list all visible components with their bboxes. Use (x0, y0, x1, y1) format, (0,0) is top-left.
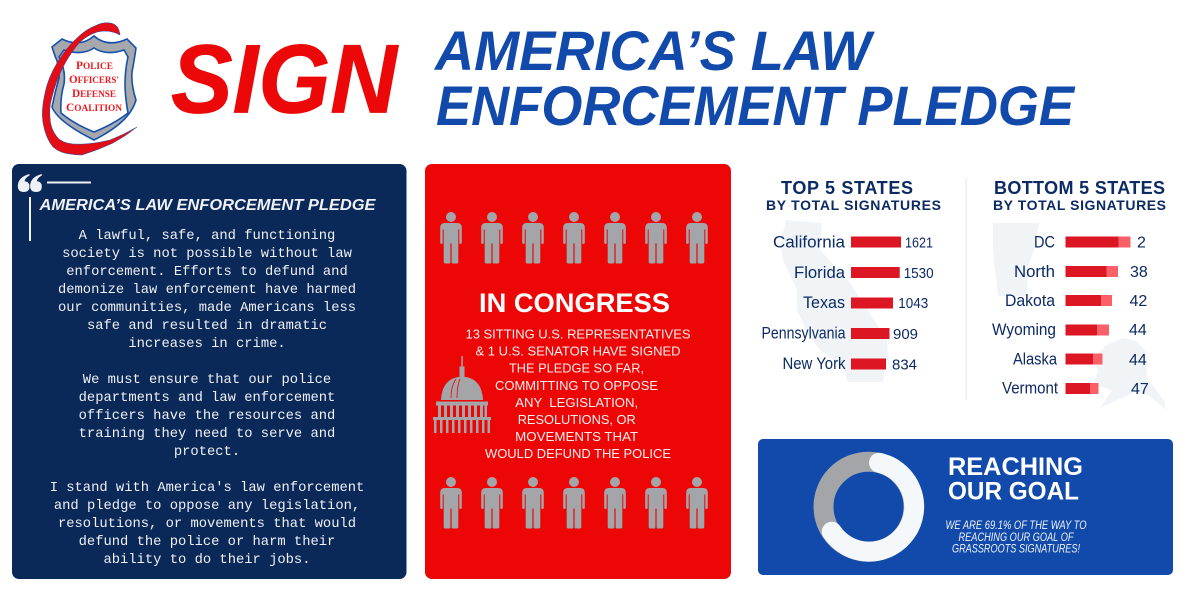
panel: reaching our goal (758, 439, 1173, 575)
pledge body text: and pledge to oppose any legislation, (54, 498, 360, 514)
values: 44 (1129, 322, 1147, 339)
pledge body text: protect. (174, 445, 240, 460)
bottom heading: BOTTOM 5 STATES (994, 178, 1165, 198)
congress body text: WOULD DEFUND THE POLICE (485, 446, 671, 461)
chart: bottom 5 states (966, 178, 1166, 410)
divider (966, 178, 967, 400)
values (892, 236, 934, 374)
values: 1621 (905, 236, 933, 252)
congress body text: 13 SITTING U.S. REPRESENTATIVES (466, 326, 691, 342)
congress body text (466, 326, 691, 461)
goal heading: REACHING (948, 453, 1083, 481)
heading: SIGN: SIGN (171, 24, 399, 134)
pledge body text: safe and resulted in dramatic (87, 318, 327, 334)
bars light (1066, 236, 1130, 394)
state labels: Texas (803, 294, 845, 312)
pledge body text: officers have the resources and (79, 408, 335, 424)
heading: America's Law Enforcement Pledge (433, 19, 1076, 137)
state labels (992, 234, 1058, 398)
goal text: REACHING OUR GOAL OF (958, 530, 1074, 544)
logo text: POLICE (76, 60, 113, 72)
state labels: Dakota (1005, 292, 1056, 310)
bars dark (1066, 236, 1118, 394)
top heading: BY TOTAL SIGNATURES (766, 197, 941, 213)
map: Alaska silhouette (1092, 338, 1166, 410)
pledge body text: training they need to serve and (79, 426, 335, 442)
congress body text: MOVEMENTS THAT (515, 429, 638, 444)
state labels: Pennsylvania (762, 324, 846, 342)
heading: America's Law Enforcement Pledge: AMERICA’S LAW (433, 19, 875, 82)
pledge body text: increases in crime. (128, 336, 286, 352)
map: Vermont silhouette (993, 223, 1039, 296)
bottom heading (993, 178, 1166, 213)
values: 2 (1137, 234, 1146, 252)
state labels: California (773, 234, 846, 252)
congress body text: & 1 U.S. SENATOR HAVE SIGNED (476, 344, 680, 359)
pledge body text: demonize law enforcement have harmed (58, 282, 356, 298)
icon: capitol building (433, 356, 491, 433)
values: 42 (1130, 293, 1147, 310)
pledge body text (50, 228, 364, 568)
pledge body text: defund the police or harm their (79, 534, 335, 550)
state labels: North (1014, 263, 1055, 281)
logo text: COALITION (66, 102, 122, 114)
bottom heading: BY TOTAL SIGNATURES (993, 197, 1166, 213)
donut chart: 69.1% (824, 462, 914, 552)
goal heading: OUR GOAL (948, 478, 1079, 506)
logo text: OFFICERS' (69, 74, 119, 86)
icon row: people top (440, 212, 708, 264)
values: 1043 (898, 296, 928, 312)
values: 1530 (904, 266, 934, 282)
values: 44 (1129, 352, 1147, 369)
pledge body text: resolutions, or movements that would (58, 516, 356, 532)
pledge body text: enforcement. Efforts to defund and (66, 264, 348, 280)
pledge body text: society is not possible without law (62, 246, 353, 262)
pledge body text: our communities, made Americans less (58, 300, 356, 316)
congress body text: RESOLUTIONS, OR (518, 412, 636, 427)
icon row: people bottom (440, 477, 708, 528)
logo text: DEFENSE (72, 88, 116, 100)
pledge heading: AMERICA’S LAW ENFORCEMENT PLEDGE (38, 197, 377, 214)
goal text: WE ARE 69.1% OF THE WAY TO (946, 518, 1086, 532)
values: 909 (893, 327, 918, 343)
state labels (762, 234, 846, 373)
state labels: Florida (794, 264, 846, 282)
state labels: Vermont (1002, 380, 1058, 398)
pledge body text: departments and law enforcement (79, 390, 335, 406)
congress body text: ANY LEGISLATION, (515, 395, 638, 410)
values: 834 (892, 358, 917, 374)
values: 38 (1130, 264, 1148, 281)
top heading: TOP 5 STATES (781, 178, 913, 198)
goal text: GRASSROOTS SIGNATURES! (952, 542, 1081, 556)
pledge body text: ability to do their jobs. (104, 552, 310, 568)
state labels: Alaska (1013, 350, 1058, 368)
icon: quotation mark (18, 174, 91, 241)
chart: top 5 states (762, 178, 941, 382)
congress body text: COMMITTING TO OPPOSE (495, 378, 658, 393)
congress body text: THE PLEDGE SO FAR, (509, 361, 644, 376)
goal heading (948, 453, 1083, 506)
goal text (946, 518, 1086, 556)
pledge body text: We must ensure that our police (83, 372, 331, 388)
bars (851, 236, 901, 370)
state labels: New York (782, 355, 846, 373)
logo: Police Officers' Defense Coalition shield (42, 23, 137, 155)
state labels: Wyoming (992, 321, 1056, 339)
congress heading: IN CONGRESS (479, 288, 670, 318)
panel: pledge text (12, 164, 406, 579)
map: California silhouette (780, 220, 888, 382)
top heading (766, 178, 941, 213)
pledge body text: I stand with America's law enforcement (50, 480, 364, 496)
state labels: DC (1034, 234, 1055, 252)
heading: America's Law Enforcement Pledge: ENFORCEMENT PLEDGE (436, 74, 1076, 137)
panel: in congress (425, 164, 731, 579)
pledge body text: A lawful, safe, and functioning (79, 228, 335, 244)
values (1129, 234, 1149, 398)
logo text (66, 60, 122, 114)
values: 47 (1131, 381, 1149, 398)
